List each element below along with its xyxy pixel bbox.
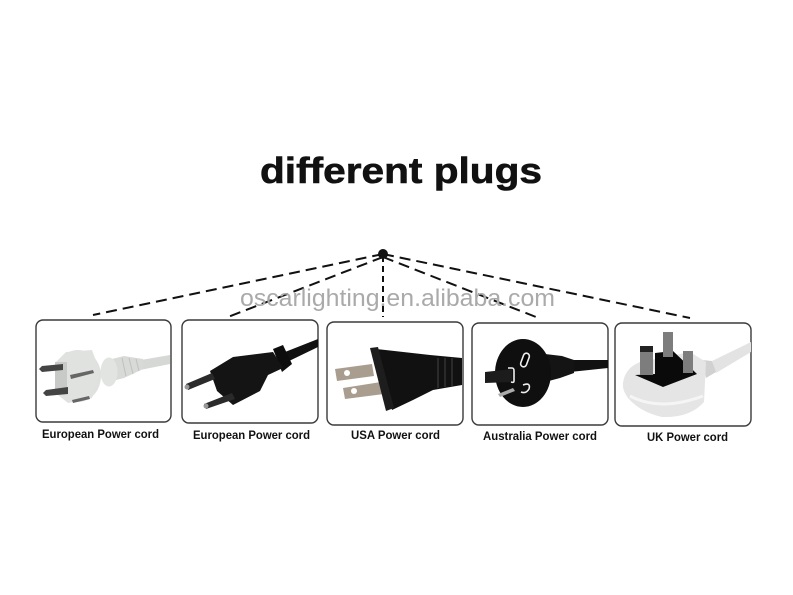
icon: white Schuko plug: [39, 350, 170, 403]
icon: black USA plug: [335, 347, 462, 411]
panel: USA plug: [327, 322, 463, 425]
connector lines from hub to panels: [93, 254, 690, 318]
title: different plugs: [260, 150, 542, 191]
panel: UK plug: [615, 323, 751, 426]
panel: European two-pin plug: [182, 320, 318, 423]
label: Australia Power cord: Australia Power cord: [483, 431, 597, 443]
label: European Power cord: European Power cord: [193, 430, 310, 442]
label: USA Power cord: USA Power cord: [351, 430, 440, 442]
label: European Power cord: European Power cord: [42, 429, 159, 441]
hub dot: [378, 249, 388, 259]
label: UK Power cord: UK Power cord: [647, 432, 728, 444]
panel: European Schuko plug: [36, 320, 171, 422]
icon: black Australian plug: [485, 339, 608, 407]
watermark: oscarlighting.en.alibaba.com: [240, 285, 555, 312]
icon: white UK plug: [623, 332, 751, 417]
panel: Australia plug: [472, 323, 608, 425]
icon: black two-pin plug: [184, 339, 318, 409]
